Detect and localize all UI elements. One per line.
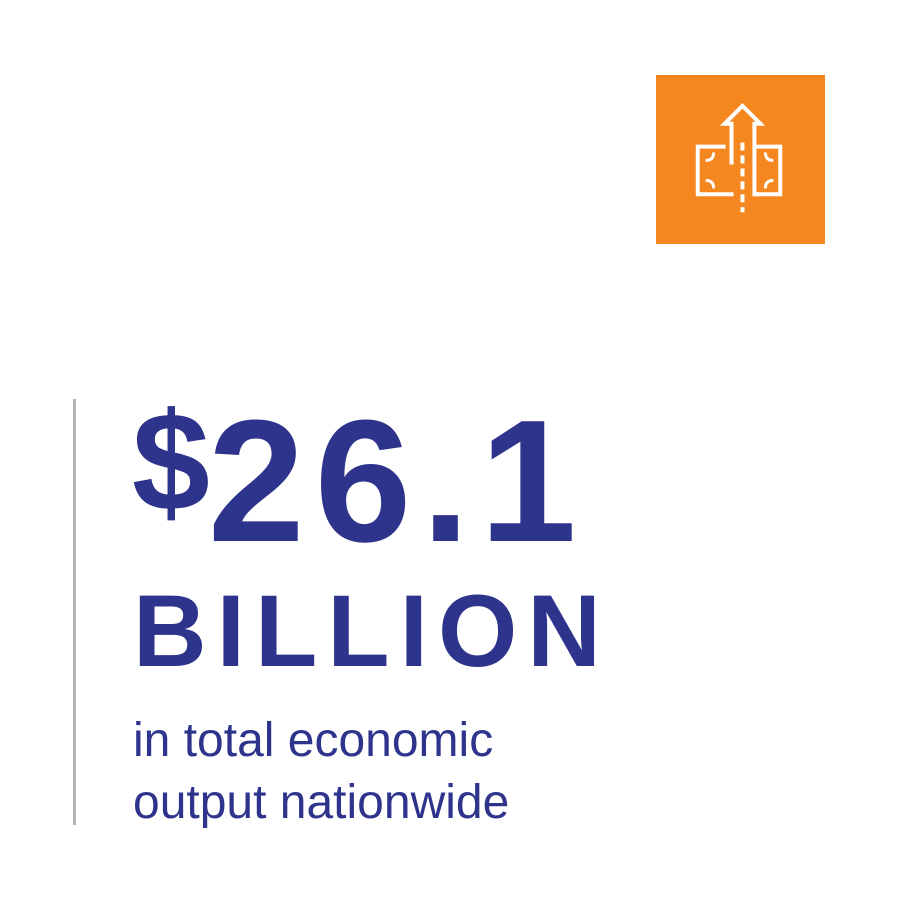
divider line xyxy=(73,399,76,825)
BILLION: BILLION xyxy=(133,574,611,688)
icon: orange box with money and arrow xyxy=(656,75,825,244)
big number: $26.1 xyxy=(132,383,587,578)
description text xyxy=(133,714,509,829)
description text: output nationwide xyxy=(133,776,509,829)
description text: in total economic xyxy=(133,714,493,767)
